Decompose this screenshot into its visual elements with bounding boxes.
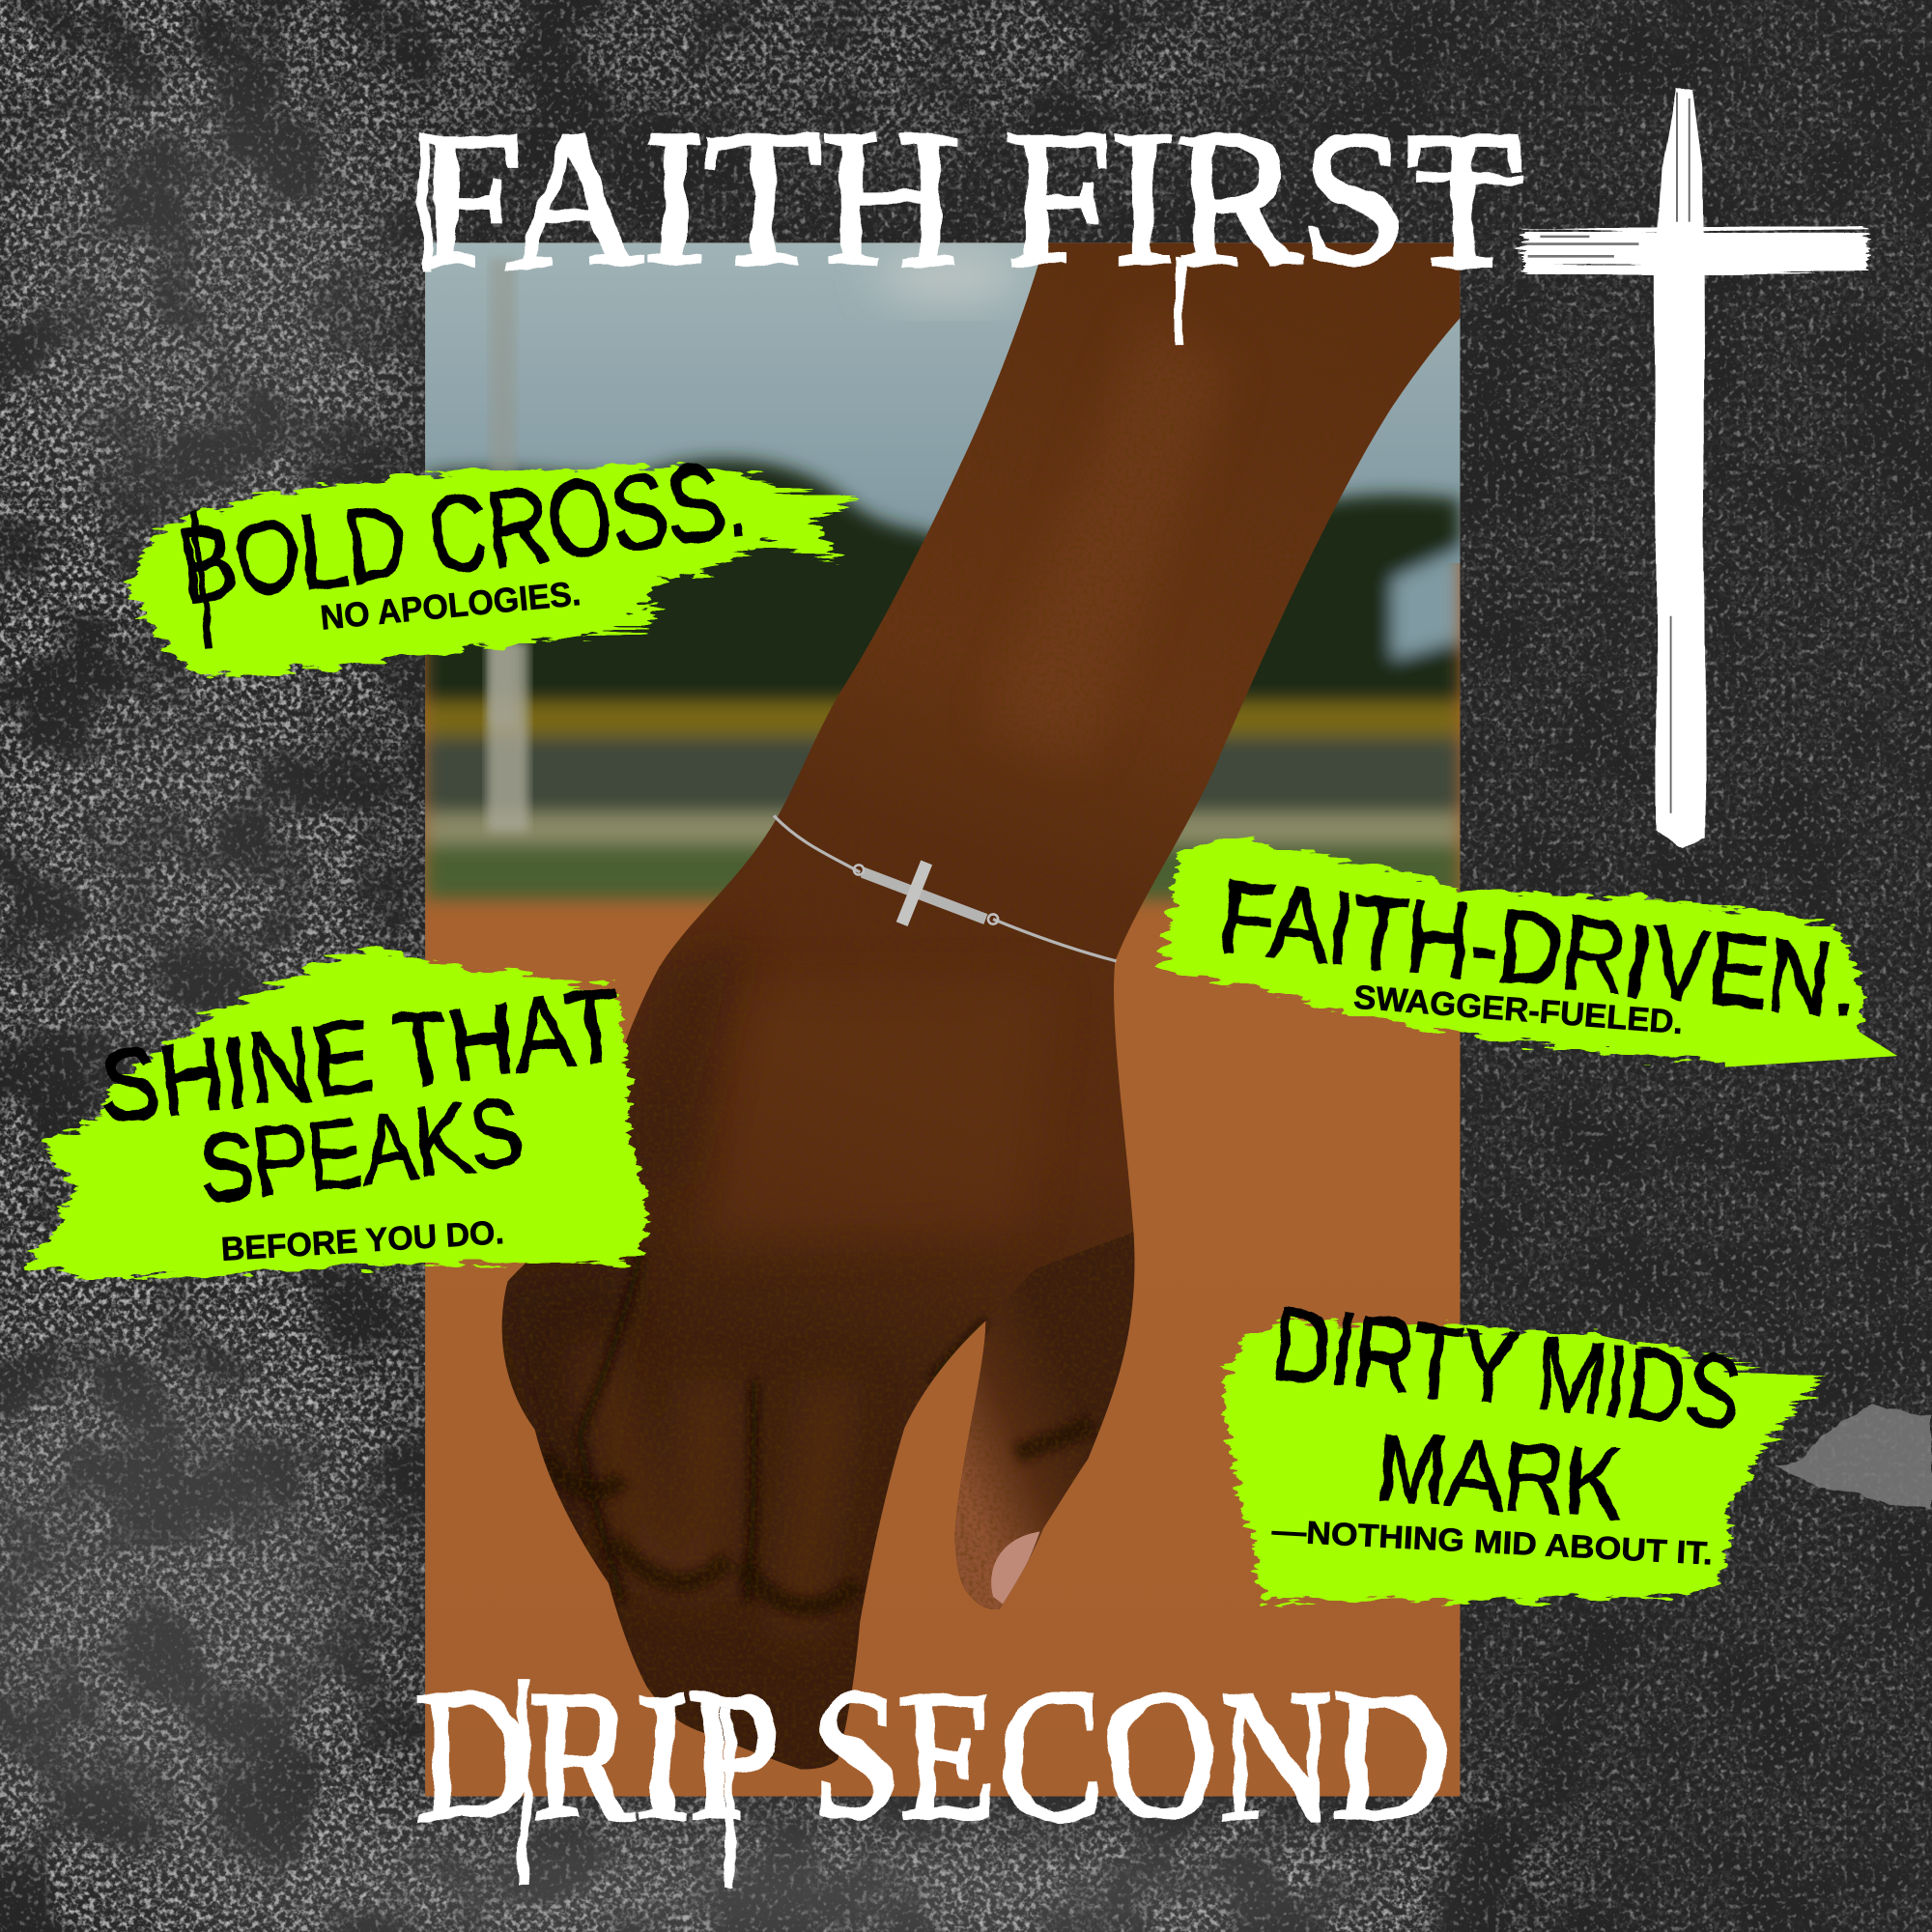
thumb bbox=[955, 1233, 1134, 1609]
field backdrop bbox=[425, 242, 1460, 1797]
headline text bbox=[173, 440, 753, 650]
brush stroke: shine bbox=[22, 951, 645, 1278]
icon: white brushed cross bbox=[1521, 89, 1868, 848]
forearm and hand bbox=[425, 242, 1460, 1797]
sub text: SWAGGER-FUELED. bbox=[1352, 979, 1685, 1041]
brush stroke: faith driven bbox=[1162, 838, 1897, 1067]
finger creases bbox=[579, 1251, 985, 1602]
finger highlights bbox=[591, 1343, 832, 1638]
sub text: NO APOLOGIES. bbox=[319, 574, 582, 638]
headline text: SPEAKS bbox=[192, 1076, 530, 1225]
callout: faith driven bbox=[1162, 838, 1897, 1067]
headline text bbox=[94, 967, 627, 1225]
heading: DRIP SECOND: DRIP SECOND bbox=[415, 1654, 1448, 1858]
sub text: BEFORE YOU DO. bbox=[220, 1214, 505, 1268]
brush stroke: dirty mids bbox=[1220, 1321, 1824, 1600]
headline text: SHINE THAT bbox=[94, 967, 627, 1146]
headline text: DIRTY MIDS bbox=[1266, 1285, 1747, 1453]
bracelet with sideways cross bbox=[774, 815, 1117, 961]
panel: photo of wrist on baseball field bbox=[425, 242, 1460, 1797]
brush stroke: bold cross bbox=[131, 466, 863, 678]
headline text: MARK bbox=[1373, 1412, 1626, 1539]
headline text bbox=[1266, 1285, 1747, 1539]
callout: dirty mids mark bbox=[1220, 1285, 1824, 1600]
heading: FAITH FIRST: FAITH FIRST bbox=[415, 90, 1521, 306]
sub text: —NOTHING MID ABOUT IT. bbox=[1271, 1514, 1714, 1573]
callout: shine that speaks bbox=[22, 951, 645, 1278]
callout: bold cross bbox=[131, 440, 863, 678]
headline text: BOLD CROSS. bbox=[173, 440, 753, 627]
